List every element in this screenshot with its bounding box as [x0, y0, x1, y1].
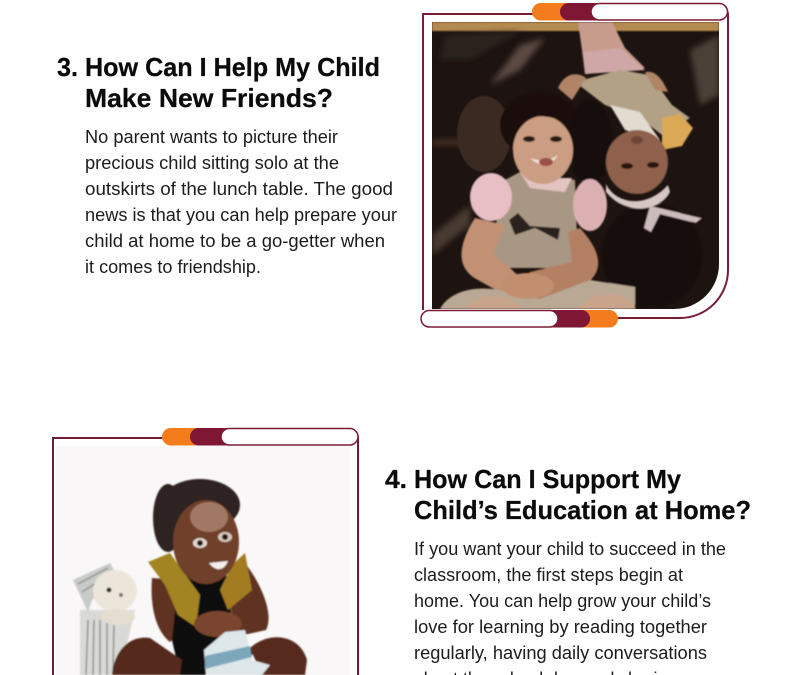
left girl fuzzy hair: [457, 96, 511, 172]
legs: [112, 638, 182, 675]
text block: question 4 body: classroom, the first steps begin at: [414, 565, 683, 585]
bear: [80, 610, 135, 675]
heading: question 4: 4.: [385, 464, 407, 494]
left girl arms and skirt: [460, 217, 518, 292]
text block: question 3 body: it comes to friendship.: [85, 257, 261, 277]
pill: top accent: [532, 3, 728, 20]
text block: question 4 body: [414, 539, 726, 675]
text block: question 3 body: precious child sitting solo at the: [85, 153, 339, 173]
heading: question 3: How Can I Help My Child: [85, 52, 380, 82]
sofa highlights: [432, 32, 719, 255]
arms: [150, 577, 176, 643]
pill: bottom accent: [421, 310, 618, 328]
dark dress: [172, 565, 255, 675]
pill: top accent: [162, 428, 358, 446]
text block: question 3 body: No parent wants to picture their: [85, 127, 338, 147]
blue toy: [204, 630, 270, 675]
left girl face: [513, 116, 573, 184]
frame: question 3 photo: [421, 3, 728, 328]
heading: question 3: [57, 52, 380, 113]
hair: [172, 478, 242, 520]
face: [173, 500, 239, 584]
heading: question 4: How Can I Support My: [414, 464, 682, 494]
right girl dress and legs: [578, 22, 645, 74]
text block: question 4 body: home. You can help grow your child’s: [414, 591, 711, 611]
heading: question 3: 3.: [57, 52, 78, 82]
heading: question 4: Child’s Education at Home?: [414, 495, 751, 525]
frame: question 4 photo: [53, 428, 358, 675]
hands: [194, 611, 242, 637]
text block: question 3 body: child at home to be a go-getter when: [85, 231, 385, 251]
text block: question 3 body: [85, 127, 397, 277]
right girl hair: [602, 203, 702, 307]
photo: two girls on a leather sofa: [432, 22, 719, 309]
text block: question 3 body: outskirts of the lunch table. The good: [85, 179, 393, 199]
text block: question 4 body: If you want your child to succeed in the: [414, 539, 726, 559]
headband: [606, 184, 670, 209]
heading: question 4: [385, 464, 751, 525]
heading: question 3: Make New Friends?: [85, 83, 333, 113]
text block: question 3 body: news is that you can help prepare your: [85, 205, 397, 225]
photo: child sitting with stuffed toys: [72, 478, 308, 675]
text block: question 4 body: regularly, having daily conversations: [414, 643, 707, 663]
right girl face: [606, 130, 668, 194]
text block: question 4 body: love for learning by reading together: [414, 617, 707, 637]
left girl dress: [487, 172, 578, 268]
